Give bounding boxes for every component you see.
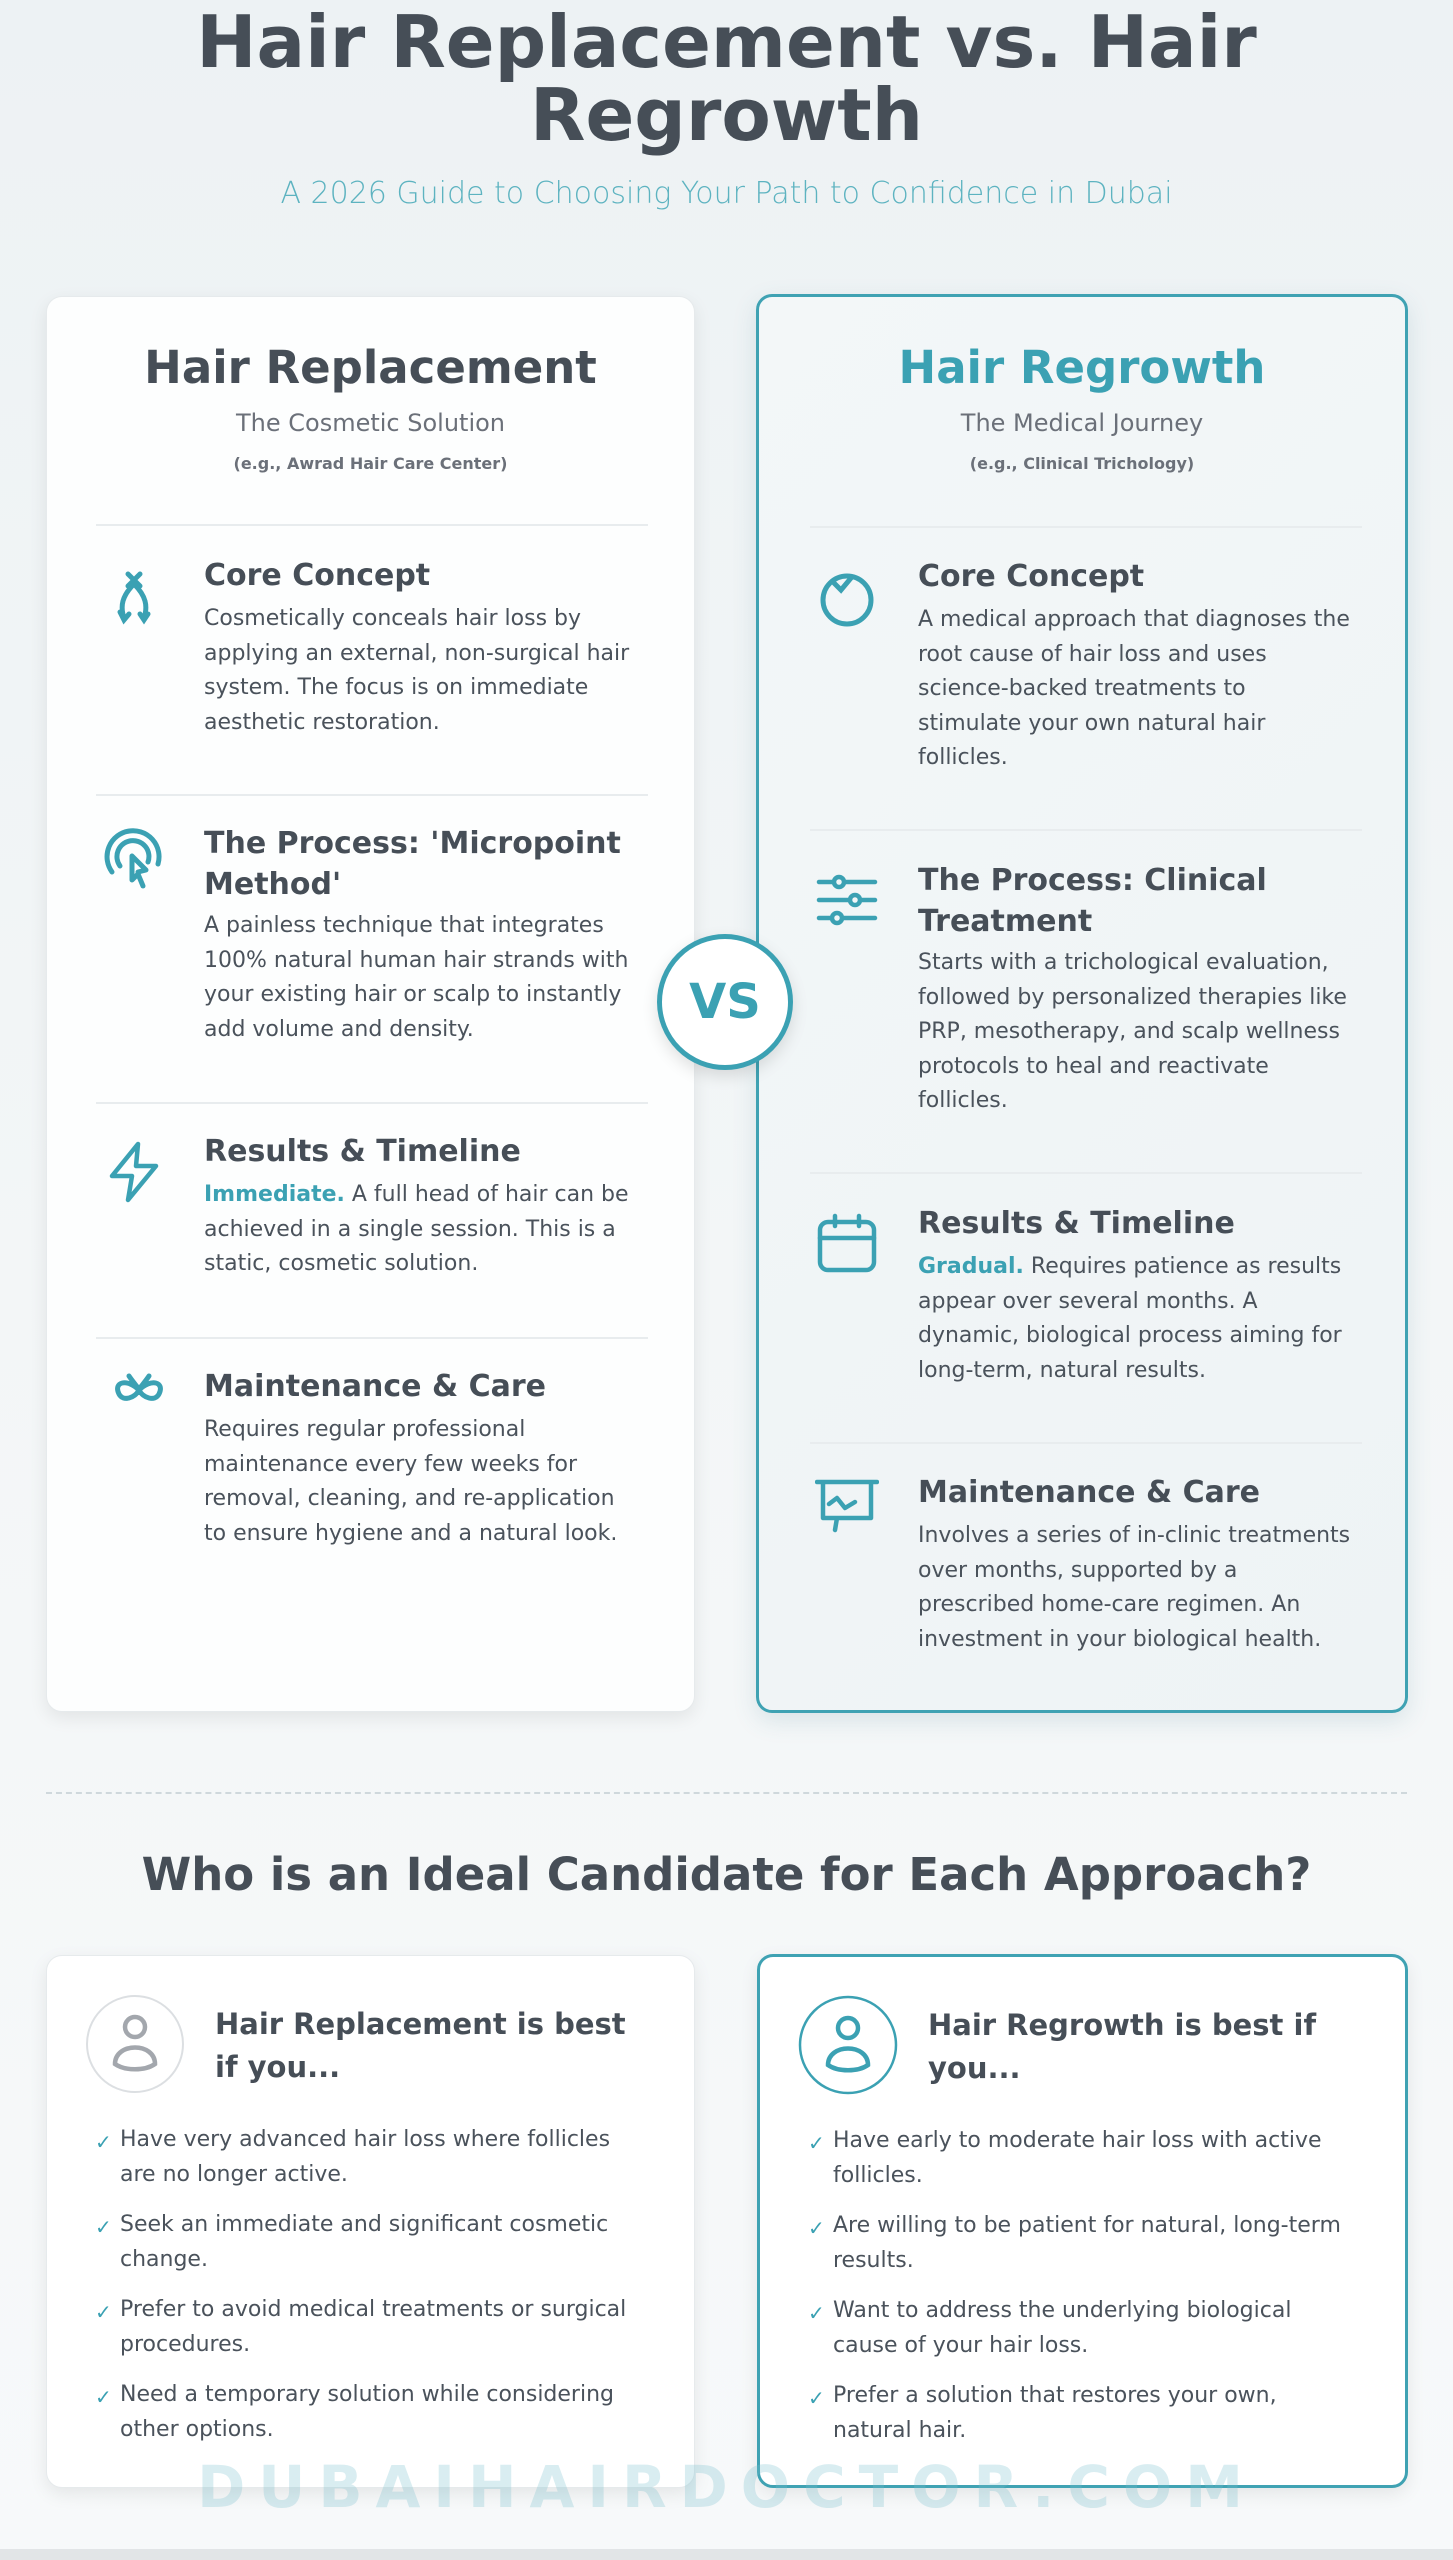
text: process (replacement): your existing hair or scalp to instantly xyxy=(204,982,621,1007)
section heading: ideal candidate: Who is an Ideal Candidate for Each Approach? xyxy=(142,1848,1311,1901)
text: maintenance (replacement): maintenance every few weeks for xyxy=(204,1452,577,1476)
title xyxy=(196,0,1257,157)
text: process (regrowth): protocols to heal and reactivate xyxy=(918,1054,1269,1078)
panel: regrowth candidate xyxy=(757,1954,1408,2488)
example: (e.g., Clinical Trichology) xyxy=(970,454,1194,473)
heading xyxy=(928,2008,1316,2085)
text: process (replacement): add volume and density. xyxy=(204,1016,474,1042)
list: follicles. xyxy=(833,2162,923,2188)
text: maintenance (replacement): removal, cleaning, and re-application xyxy=(204,1486,615,1511)
text: core concept (regrowth): science-backed treatments to xyxy=(918,676,1246,701)
text: maintenance (regrowth): prescribed home-care regimen. An xyxy=(918,1592,1300,1617)
icon: presentation chart xyxy=(815,1480,879,1532)
vs badge: VS xyxy=(689,974,761,1030)
list: are no longer active. xyxy=(120,2162,348,2186)
heading: hair regrowth: Hair Regrowth xyxy=(899,341,1265,394)
list: Prefer a solution that restores your own, xyxy=(833,2383,1277,2408)
heading: hair replacement: Hair Replacement xyxy=(144,341,597,394)
subheading: The Cosmetic Solution xyxy=(236,409,505,437)
text: process (replacement): 100% natural human hair strands with xyxy=(204,948,628,972)
text: core concept (regrowth): follicles. xyxy=(918,745,1008,770)
text: process (regrowth): Starts with a trichological evaluation, xyxy=(918,950,1329,975)
list: ✓ xyxy=(95,2385,112,2409)
text: maintenance (replacement) xyxy=(204,1369,617,1546)
text: results (replacement): achieved in a single session. This is a xyxy=(204,1216,616,1242)
list: Prefer to avoid medical treatments or surgical xyxy=(120,2297,626,2322)
list: Have early to moderate hair loss with active xyxy=(833,2128,1322,2153)
list: cause of your hair loss. xyxy=(833,2332,1088,2358)
list: change. xyxy=(120,2246,208,2272)
list: ✓ xyxy=(95,2130,112,2154)
list: Have very advanced hair loss where follicles xyxy=(120,2127,610,2152)
text: maintenance (regrowth): Involves a series of in-clinic treatments xyxy=(918,1523,1350,1548)
list: Need a temporary solution while considering xyxy=(120,2382,614,2407)
text: process (replacement): The Process: 'Micropoint xyxy=(204,826,621,861)
text: core concept (replacement): Cosmetically conceals hair loss by xyxy=(204,606,581,631)
text: core concept (regrowth): root cause of hair loss and uses xyxy=(918,642,1267,666)
panel: replacement candidate xyxy=(46,1955,695,2488)
text: process (regrowth): PRP, mesotherapy, and scalp wellness xyxy=(918,1019,1340,1044)
text: results (replacement) xyxy=(204,1134,629,1276)
text: core concept (replacement): aesthetic restoration. xyxy=(204,710,440,734)
subheading: The Medical Journey xyxy=(961,409,1203,437)
text: results (replacement): Results & Timeline xyxy=(204,1134,521,1169)
list: Want to address the underlying biological xyxy=(833,2298,1291,2323)
text: results (regrowth): appear over several months. A xyxy=(918,1288,1258,1314)
list: ✓ xyxy=(808,2131,825,2155)
text: core concept (replacement): Core Concept xyxy=(204,558,430,593)
text: maintenance (replacement): Requires regular professional xyxy=(204,1417,525,1442)
example: (e.g., Awrad Hair Care Center) xyxy=(234,454,507,473)
text: maintenance (replacement): Maintenance & Care xyxy=(204,1369,546,1404)
list: ✓ xyxy=(95,2215,112,2239)
text: results (replacement): Immediate. A full head of hair can be xyxy=(204,1182,629,1207)
text: process (replacement) xyxy=(204,826,628,1042)
text: maintenance (regrowth) xyxy=(918,1475,1350,1652)
text: core concept (regrowth): stimulate your own natural hair xyxy=(918,710,1265,736)
title: Regrowth xyxy=(530,73,923,157)
list: other options. xyxy=(120,2416,274,2442)
text: process (regrowth): followed by personalized therapies like xyxy=(918,984,1347,1010)
icon: sliders xyxy=(816,874,878,926)
text: process (regrowth) xyxy=(918,863,1347,1113)
list: procedures. xyxy=(120,2332,250,2356)
icon: hair strands xyxy=(118,572,150,624)
text: core concept (regrowth) xyxy=(918,559,1350,770)
text: core concept (regrowth): Core Concept xyxy=(918,559,1144,594)
text: process (regrowth): Treatment xyxy=(918,904,1092,939)
list: ✓ xyxy=(808,2386,825,2410)
text: process (replacement): Method' xyxy=(204,867,341,902)
list: ✓ xyxy=(808,2216,825,2240)
heading: Hair Regrowth is best if xyxy=(928,2008,1316,2042)
text: process (regrowth): The Process: Clinical xyxy=(918,863,1267,898)
panel: hair regrowth xyxy=(756,294,1408,1713)
list: ✓ xyxy=(95,2300,112,2324)
icon: touch pointer xyxy=(104,828,162,888)
text: results (regrowth): long-term, natural results. xyxy=(918,1358,1206,1382)
text: maintenance (regrowth): investment in your biological health. xyxy=(918,1626,1321,1652)
heading: you... xyxy=(928,2051,1021,2085)
text: core concept (replacement) xyxy=(204,558,630,734)
icon: user gray xyxy=(86,1995,184,2093)
panel: hair replacement xyxy=(46,296,695,1712)
text: maintenance (replacement): to ensure hygiene and a natural look. xyxy=(204,1520,617,1546)
subtitle: A 2026 Guide to Choosing Your Path to Confidence in Dubai xyxy=(280,176,1173,211)
text: process (replacement): A painless technique that integrates xyxy=(204,913,604,938)
icon: hair tie xyxy=(115,1374,163,1401)
list: Are willing to be patient for natural, long-term xyxy=(833,2213,1341,2238)
heading: if you... xyxy=(215,2050,340,2084)
icon: circle xyxy=(820,574,874,626)
text: results (regrowth): Gradual. Requires patience as results xyxy=(918,1254,1341,1279)
text: process (regrowth): follicles. xyxy=(918,1088,1008,1113)
icon: lightning xyxy=(110,1142,158,1202)
heading: Hair Replacement is best xyxy=(215,2007,626,2041)
text: core concept (regrowth): A medical approach that diagnoses the xyxy=(918,607,1350,632)
icon: user teal xyxy=(798,1996,898,2094)
text: results (replacement): static, cosmetic solution. xyxy=(204,1251,478,1276)
list: ✓ xyxy=(808,2301,825,2325)
text: maintenance (regrowth): over months, supported by a xyxy=(918,1558,1237,1582)
list: results. xyxy=(833,2248,914,2272)
text: maintenance (regrowth): Maintenance & Care xyxy=(918,1475,1260,1510)
list xyxy=(808,2128,1341,2442)
list xyxy=(95,2127,626,2442)
text: results (regrowth) xyxy=(918,1206,1342,1382)
watermark: DUBAIHAIRDOCTOR.COM xyxy=(197,2453,1256,2521)
vs badge xyxy=(657,934,793,1070)
text: core concept (replacement): system. The focus is on immediate xyxy=(204,675,588,700)
text: results (regrowth): Results & Timeline xyxy=(918,1206,1235,1241)
heading xyxy=(215,2007,626,2084)
title: Hair Replacement vs. Hair xyxy=(196,0,1257,84)
list: Seek an immediate and significant cosmetic xyxy=(120,2212,608,2237)
list: natural hair. xyxy=(833,2418,966,2442)
icon: calendar xyxy=(818,1214,876,1272)
text: core concept (replacement): applying an external, non-surgical hair xyxy=(204,640,629,666)
text: results (regrowth): dynamic, biological process aiming for xyxy=(918,1323,1342,1348)
